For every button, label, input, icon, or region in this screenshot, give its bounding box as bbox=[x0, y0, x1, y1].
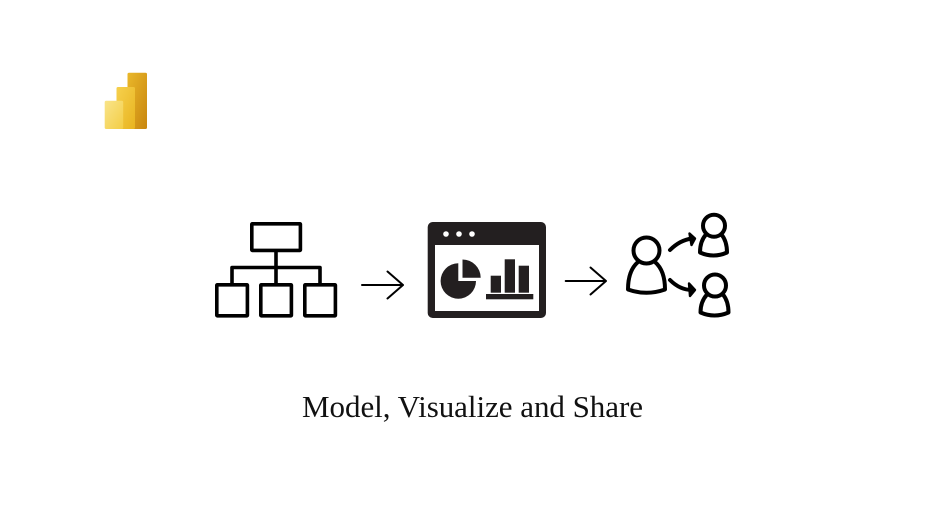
icon: dashboard window bbox=[428, 222, 546, 318]
icon: Power BI logo bbox=[105, 73, 147, 129]
icon: sharing people bbox=[628, 215, 728, 316]
title caption: Model, Visualize and Share bbox=[302, 389, 643, 424]
icon: data model hierarchy bbox=[217, 224, 335, 316]
arrow: visualize to share bbox=[566, 268, 606, 294]
arrow: model to visualize bbox=[362, 272, 403, 298]
